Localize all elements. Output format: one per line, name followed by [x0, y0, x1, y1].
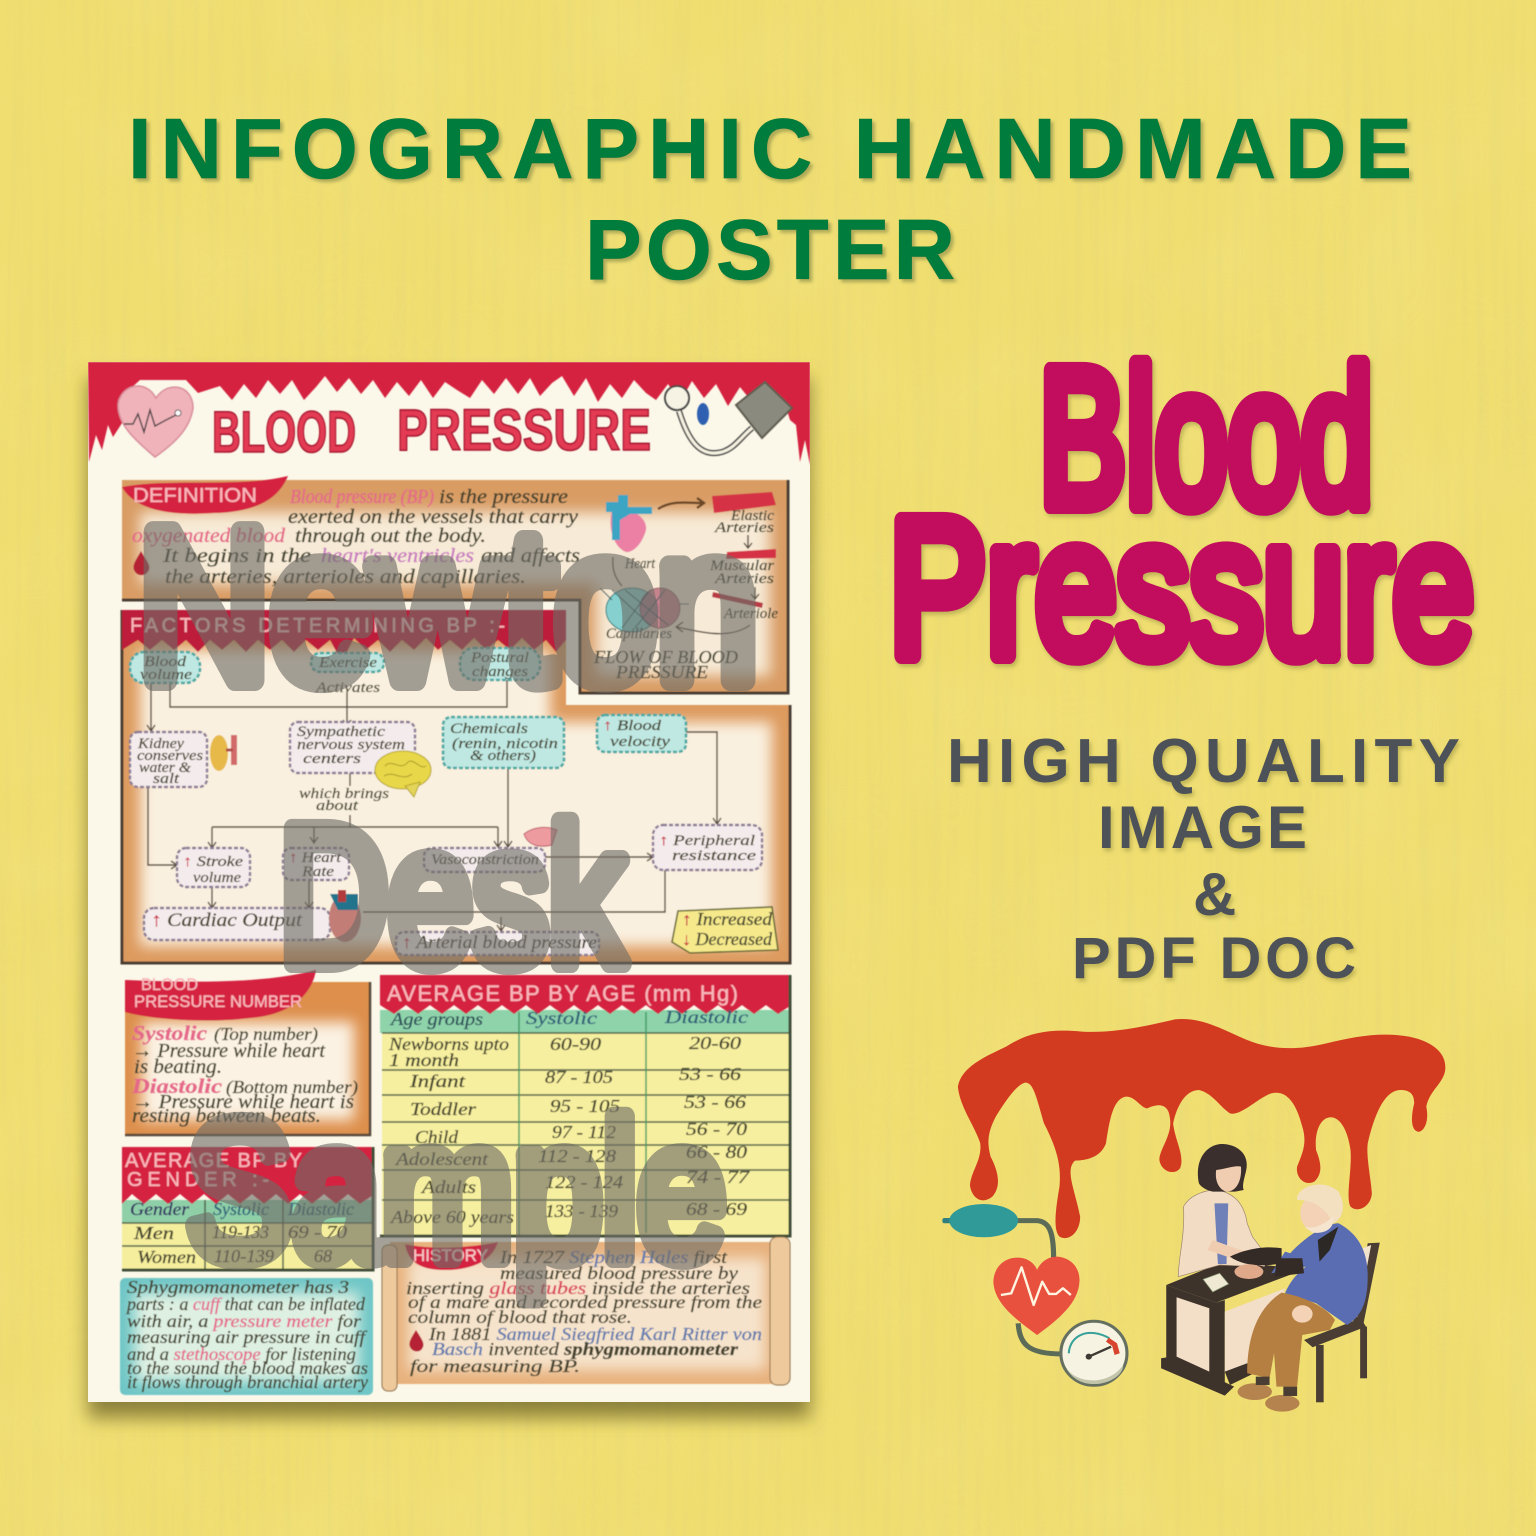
diagram labels: Arteries	[714, 571, 774, 587]
bp number ribbon	[125, 970, 316, 1020]
watermark: Newton Desk Sample	[138, 485, 758, 1300]
poster heading	[213, 407, 651, 454]
gender table rows: 119-133	[212, 1222, 269, 1242]
illustration: blood drip, doctor and patient	[942, 1019, 1445, 1412]
node: vasoconstriction	[424, 848, 545, 872]
icon: heart with ecg	[993, 1257, 1080, 1335]
node: blood volume: volume	[140, 667, 192, 683]
node: sympathetic nervous system	[290, 722, 415, 773]
history text: In 1727 Stephen Hales first	[499, 1247, 728, 1267]
icon: pressure gauge	[1061, 1321, 1127, 1385]
bp number text: → Pressure while heart	[132, 1040, 325, 1062]
icon: artery	[524, 827, 557, 846]
label: which brings about	[298, 787, 389, 811]
note text: parts : a cuff that can be inflated	[125, 1294, 365, 1314]
node: kidney: water &	[139, 760, 191, 776]
diagram labels: FLOW OF BLOOD	[593, 647, 738, 667]
age table rows: 87 - 105	[545, 1067, 613, 1087]
icon: blood drop	[133, 551, 149, 575]
bp number text: (Top number)	[214, 1024, 318, 1044]
age table rows: Newborns upto	[388, 1034, 509, 1054]
bp number text	[131, 1021, 358, 1127]
history ribbon	[405, 1242, 498, 1270]
note text: to the sound the blood makes as	[127, 1358, 368, 1378]
factors header: FACTORS DETERMINING BP :-	[130, 615, 505, 637]
flow arrows and vessels	[613, 492, 776, 634]
age table rows	[388, 1007, 751, 1227]
node: peripheral resistance	[653, 825, 762, 870]
definition text: and affects	[481, 545, 580, 567]
icon: ecg heart	[118, 386, 193, 457]
node: kidney: conserves	[137, 748, 203, 764]
node: kidney: Kidney	[137, 736, 184, 752]
definition text: through out the body.	[295, 525, 486, 547]
node: postural changes: changes	[472, 664, 528, 680]
age table rows: 20-60	[689, 1033, 741, 1053]
node: blood velocity: velocity	[610, 734, 670, 750]
bp number text: (Bottom number)	[226, 1077, 358, 1097]
node: chemicals	[443, 717, 564, 768]
blood drip	[958, 1019, 1445, 1238]
text: high quality image and PDF doc: HIGH QUALITY	[947, 727, 1460, 796]
node: blood velocity	[597, 715, 686, 752]
definition text: Blood pressure (BP)	[290, 486, 434, 508]
node: blood volume: Blood	[144, 654, 187, 670]
diagram labels: Muscular	[709, 558, 774, 574]
node: blood volume	[130, 652, 200, 683]
definition text: the arteries, arterioles and capillaries.	[165, 566, 526, 588]
history text: Basch invented sphygmomanometer	[432, 1339, 738, 1359]
definition text: oxygenated blood	[132, 525, 286, 547]
node: kidney: salt	[153, 771, 180, 787]
panel: history scroll	[382, 1237, 790, 1391]
legend: increased / decreased: ↑ Increased	[682, 909, 772, 929]
icon: heart anatomy	[606, 495, 652, 552]
node: kidney	[130, 732, 207, 787]
note text: and a stethoscope for listening	[127, 1344, 356, 1364]
diagram labels: Elastic	[730, 508, 774, 524]
node: postural changes	[460, 648, 540, 680]
bp number text: → Pressure while heart is	[132, 1091, 354, 1113]
node: peripheral resistance: ↑ Peripheral	[659, 833, 755, 849]
title: POSTER	[585, 203, 955, 298]
label: which brings about: about	[316, 798, 359, 814]
icon: heart small	[329, 890, 361, 942]
gender table rows: 110-139	[214, 1246, 274, 1266]
node: sympathetic nervous system: centers	[303, 751, 361, 767]
legend: increased / decreased	[672, 907, 778, 953]
history text: column of blood that rose.	[408, 1307, 632, 1327]
definition text: It begins in the	[162, 545, 311, 567]
age table rows: 53 - 66	[679, 1064, 741, 1084]
label: activates: Activates	[315, 680, 380, 696]
diagram labels	[593, 508, 778, 682]
figure: patient	[1238, 1185, 1368, 1412]
age table rows: 74 - 77	[686, 1167, 751, 1187]
age table rows: Age groups	[390, 1009, 483, 1029]
age table rows: Infant	[409, 1071, 466, 1091]
bp number text: Diastolic	[131, 1074, 223, 1098]
watermark word Desk: Desk	[279, 787, 624, 1005]
history text: of a mare and recorded pressure from the	[408, 1292, 762, 1312]
definition text: heart's ventricles	[321, 545, 474, 567]
icon: inflation bulb	[942, 1204, 1018, 1237]
flow connectors	[147, 680, 721, 931]
node: blood velocity: ↑ Blood	[603, 718, 662, 734]
factors header	[121, 609, 566, 654]
poster heading: PRESSURE	[397, 398, 651, 463]
node: postural changes: Postural	[470, 650, 529, 666]
age table rows: 97 - 112	[552, 1122, 616, 1142]
definition text: is the pressure	[439, 486, 568, 508]
figure: chair	[1304, 1243, 1380, 1402]
flow of blood diagram	[593, 492, 778, 682]
node: cardiac output: ↑ Cardiac Output	[151, 910, 303, 931]
gender table rows	[130, 1199, 354, 1267]
bp number text: Systolic	[132, 1021, 208, 1045]
icon: history drop	[409, 1330, 424, 1352]
node: stroke volume: volume	[193, 870, 241, 886]
age table rows: 122 - 124	[545, 1172, 623, 1192]
icon: sphygmomanometer	[665, 382, 792, 453]
bp number text: resting between beats.	[132, 1105, 321, 1127]
bp number ribbon: PRESSURE NUMBER	[134, 992, 302, 1011]
icon: kidney	[210, 735, 237, 771]
definition text: exerted on the vessels that carry	[288, 506, 578, 528]
node: heart rate: ↑ Heart	[289, 850, 342, 866]
history text: measured blood pressure by	[500, 1263, 738, 1283]
tubes	[1016, 1221, 1062, 1354]
history ribbon: HISTORY	[413, 1246, 488, 1265]
subject heading: Blood Pressure: Blood	[1039, 329, 1373, 547]
table: average BP by gender	[122, 1147, 373, 1270]
gender table rows: Women	[137, 1247, 196, 1267]
node: exercise: Exercise	[318, 655, 377, 671]
panel: sphygmomanometer note	[120, 1277, 373, 1395]
age table rows: 60-90	[550, 1034, 601, 1054]
icon: capillary bed	[600, 588, 689, 632]
gender table rows: Systolic	[213, 1199, 269, 1219]
node: stroke volume: ↑ Stroke	[183, 854, 243, 870]
note text: it flows through branchial artery	[127, 1372, 368, 1392]
node: chemicals: Chemicals	[450, 721, 528, 737]
panel: definition	[122, 476, 788, 693]
age table rows: 95 - 105	[550, 1096, 620, 1116]
node: sympathetic nervous system: nervous system	[297, 737, 405, 753]
node: peripheral resistance: resistance	[672, 848, 756, 864]
gender table rows: 68	[314, 1246, 332, 1266]
icon: brain	[375, 751, 431, 797]
node: stroke volume	[177, 848, 250, 887]
age table rows: 66 - 80	[686, 1142, 747, 1162]
age table rows: Above 60 years	[390, 1207, 514, 1227]
diagram labels: Arteriole	[723, 606, 778, 622]
table: average BP by age	[380, 975, 790, 1236]
gender table heading: GENDER :-	[127, 1169, 269, 1191]
gender table rows: Diastolic	[287, 1199, 354, 1219]
diagram labels: Heart	[624, 556, 656, 572]
title	[128, 102, 1412, 298]
gender table heading	[125, 1150, 302, 1191]
label: which brings about: which brings	[299, 786, 389, 802]
note text: Sphygmomanometer has 3	[127, 1277, 349, 1297]
age table rows: Diastolic	[664, 1007, 748, 1027]
node: heart rate	[283, 848, 349, 880]
node: chemicals: (renin, nicotin	[452, 736, 558, 752]
diagram labels: Capillaries	[606, 626, 672, 642]
watermark word Newton: Newton	[138, 485, 758, 726]
text: high quality image and PDF doc	[947, 727, 1460, 991]
note text: with air, a pressure meter for	[127, 1311, 361, 1331]
diagram labels: PRESSURE	[615, 662, 708, 682]
figure: doctor	[1178, 1144, 1282, 1279]
age table rows: Adults	[421, 1177, 476, 1197]
poster sheet	[88, 362, 810, 1402]
bp number text: is beating.	[134, 1056, 222, 1078]
age table rows: Adolescent	[395, 1149, 489, 1169]
node: heart rate: Rate	[301, 864, 334, 880]
age table heading: AVERAGE BP BY AGE (mm Hg)	[387, 981, 738, 1006]
gender table rows: Gender	[130, 1199, 189, 1219]
node: sympathetic nervous system: Sympathetic	[297, 724, 385, 740]
panel: factors determining BP	[122, 610, 790, 963]
age table rows: 56 - 70	[686, 1119, 747, 1139]
watermark word Sample: Sample	[186, 1082, 726, 1300]
age table rows: 112 - 128	[538, 1146, 616, 1166]
definition text	[132, 486, 580, 588]
history text: for measuring BP.	[410, 1356, 580, 1376]
gender table rows: 69 - 70	[288, 1222, 347, 1242]
diagram labels: Arteries	[714, 520, 774, 536]
note text	[125, 1277, 368, 1392]
history text: inserting glass tubes inside the arteries	[406, 1278, 750, 1298]
node: arterial blood pressure: ↑ Arterial blood pressure	[402, 932, 597, 952]
figure: desk	[1161, 1260, 1303, 1396]
poster contents	[88, 362, 810, 1395]
age table rows: 53 - 66	[684, 1092, 746, 1112]
gender table heading: AVERAGE BP BY	[125, 1150, 302, 1172]
note text: measuring air pressure in cuff	[127, 1327, 367, 1347]
legend: increased / decreased: ↓ Decreased	[682, 929, 772, 949]
node: exercise	[311, 653, 384, 672]
history text: In 1881 Samuel Siegfried Karl Ritter von	[428, 1324, 762, 1344]
node: cardiac output	[144, 908, 330, 940]
definition ribbon: DEFINITION	[133, 485, 257, 507]
age table rows: Toddler	[410, 1099, 476, 1119]
subject heading: Blood Pressure	[889, 329, 1474, 697]
text: high quality image and PDF doc: &	[1193, 861, 1236, 928]
text: high quality image and PDF doc: PDF DOC	[1072, 926, 1356, 991]
poster heading: BLOOD	[212, 400, 356, 465]
age table rows: 1 month	[389, 1050, 459, 1070]
history text	[406, 1247, 762, 1376]
panel: blood pressure number	[125, 970, 370, 1135]
poster paper	[88, 362, 810, 1402]
age table rows: Child	[415, 1127, 458, 1147]
text: high quality image and PDF doc: IMAGE	[1098, 794, 1307, 861]
node: chemicals: & others)	[470, 748, 536, 764]
gender table rows: Men	[133, 1223, 174, 1243]
title: INFOGRAPHIC HANDMADE	[128, 102, 1412, 197]
age table rows: 133 - 139	[545, 1201, 618, 1221]
red dripping banner	[88, 362, 810, 465]
node: vasoconstriction: Vasoconstriction	[431, 852, 539, 868]
bp number ribbon: BLOOD	[141, 975, 198, 994]
age table rows: Systolic	[526, 1008, 597, 1028]
age table rows: 68 - 69	[686, 1199, 747, 1219]
definition ribbon	[122, 476, 288, 514]
